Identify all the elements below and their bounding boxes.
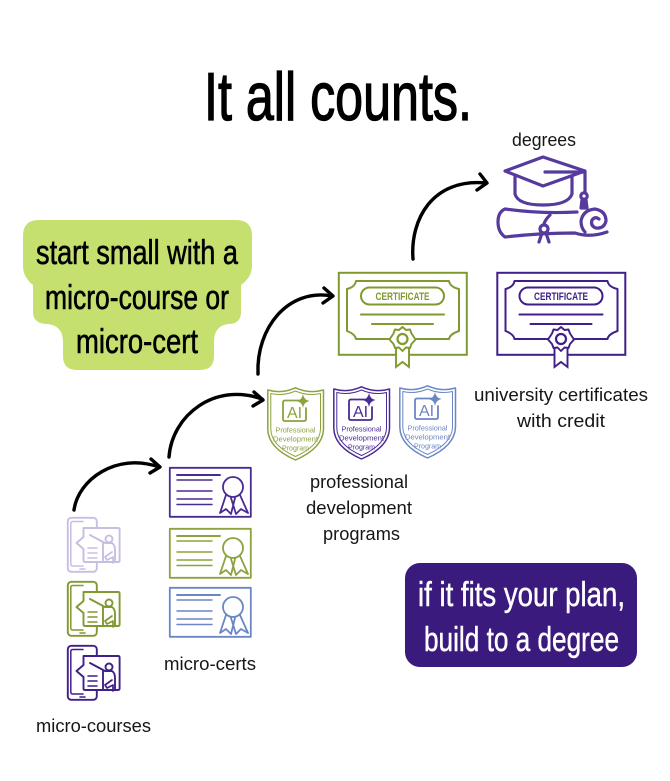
callout: start small: micro-cert [76, 323, 198, 361]
callout: start small: start small with a [36, 234, 238, 272]
icon: micro-course purple [68, 646, 120, 700]
icon: micro-cert purple [170, 468, 251, 517]
icon: badge green [268, 388, 324, 460]
callout: start small: micro-course or [45, 279, 229, 317]
label: university certificates with credit: with credit [516, 411, 605, 431]
label: professional development programs: development [306, 498, 412, 518]
callout: build to a degree: build to a degree [424, 621, 619, 659]
label: micro-courses: micro-courses [36, 716, 151, 736]
label: professional development programs: professional [310, 472, 408, 492]
label: university certificates with credit: university certificates [474, 385, 648, 405]
icon: micro-course light purple [68, 518, 120, 572]
icon: micro-cert blue [170, 588, 251, 637]
arrow: micro-courses to micro-certs [74, 459, 160, 510]
label: micro-certs: micro-certs [164, 654, 256, 674]
icon: micro-course green [68, 582, 120, 636]
icon: certificate green [339, 273, 467, 367]
label: professional development programs [306, 472, 412, 544]
arrow: micro-certs to professional programs [169, 392, 263, 457]
label: degrees: degrees [512, 130, 576, 150]
icon: graduation cap and diploma [498, 157, 607, 242]
label: university certificates with credit [474, 385, 648, 431]
callout: build to a degree: if it fits your plan, [418, 576, 625, 614]
arrow: professional programs to certificates [258, 288, 333, 374]
icon: micro-cert green [170, 529, 251, 578]
title: It all counts. [204, 59, 472, 135]
arrow: certificates to degrees [413, 174, 487, 259]
callout: start small [23, 220, 252, 370]
icon: badge purple [334, 387, 390, 459]
icon: certificate purple [497, 273, 625, 367]
callout: build to a degree [405, 563, 637, 667]
icon: badge blue [400, 386, 456, 458]
label: professional development programs: programs [323, 524, 400, 544]
